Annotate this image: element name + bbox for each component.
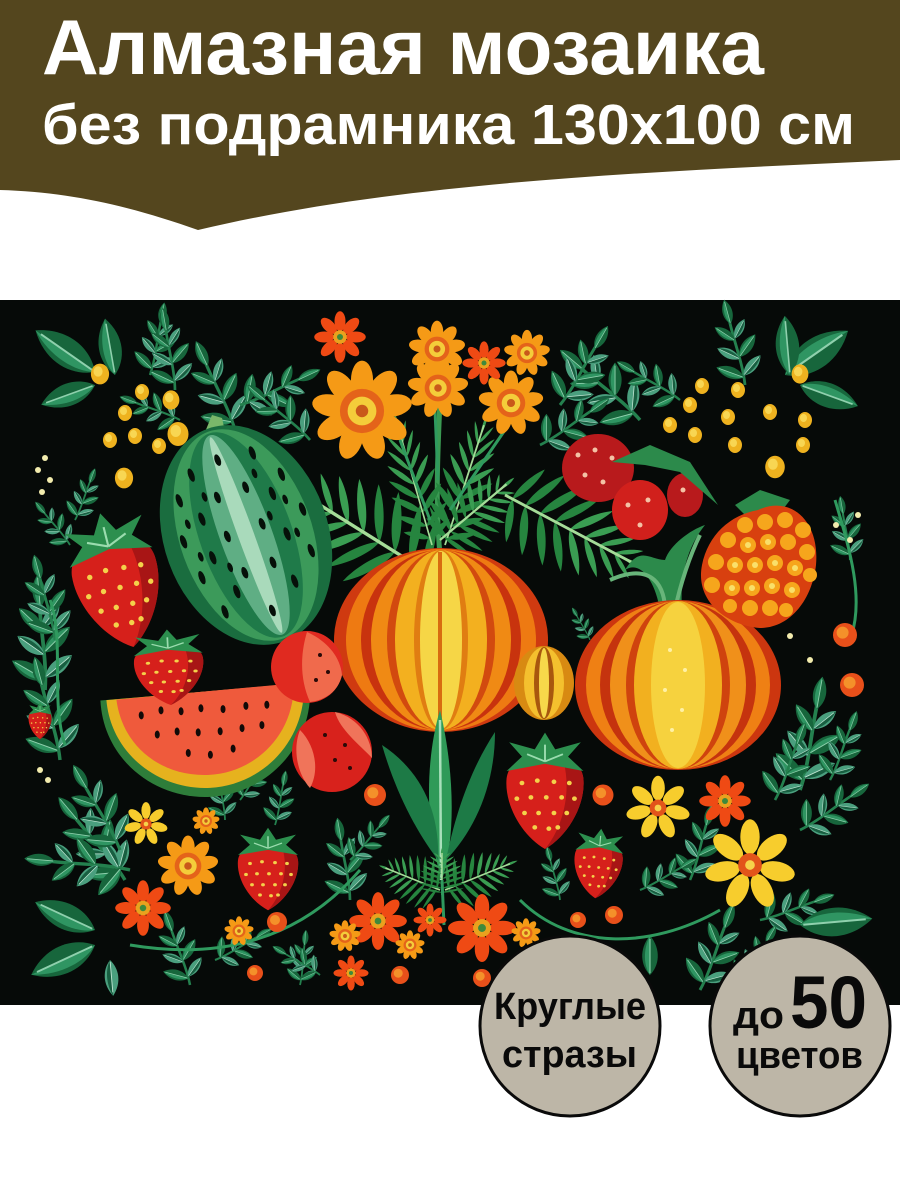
- badge: round rhinestones: Круглые: [494, 986, 646, 1028]
- corner leaves and border foliage: [0, 293, 883, 1000]
- raspberries: [562, 434, 718, 540]
- badge: up to 50 colours: цветов: [736, 1035, 863, 1077]
- pumpkin right with stem: [575, 525, 781, 770]
- small round fruits: [247, 623, 864, 987]
- yellow berry sprays: [35, 364, 861, 783]
- header banner: [0, 0, 900, 230]
- small gourd: [514, 646, 574, 720]
- badge: up to 50 colours: 50: [790, 961, 867, 1044]
- watermelon slice: [100, 683, 316, 802]
- badge: round rhinestones: стразы: [502, 1034, 637, 1076]
- subtitle: без подрамника 130х100 см: [42, 93, 855, 157]
- melon: [126, 388, 362, 669]
- top flowers: [310, 311, 551, 520]
- painting: folk fruits and flowers: [0, 293, 900, 1005]
- strawberries: [29, 503, 625, 910]
- cut red fruits: [271, 631, 372, 792]
- title: Алмазная мозаика: [42, 3, 765, 91]
- ferns behind first pumpkin: [250, 400, 672, 622]
- badge: round rhinestones: [480, 936, 660, 1116]
- pumpkin left: [334, 548, 548, 732]
- badge: up to 50 colours: [710, 936, 890, 1116]
- golden berry cluster: [701, 490, 817, 628]
- lower flowers: [115, 775, 797, 991]
- badge: up to 50 colours: до: [733, 995, 784, 1037]
- central lower plant: [369, 710, 528, 925]
